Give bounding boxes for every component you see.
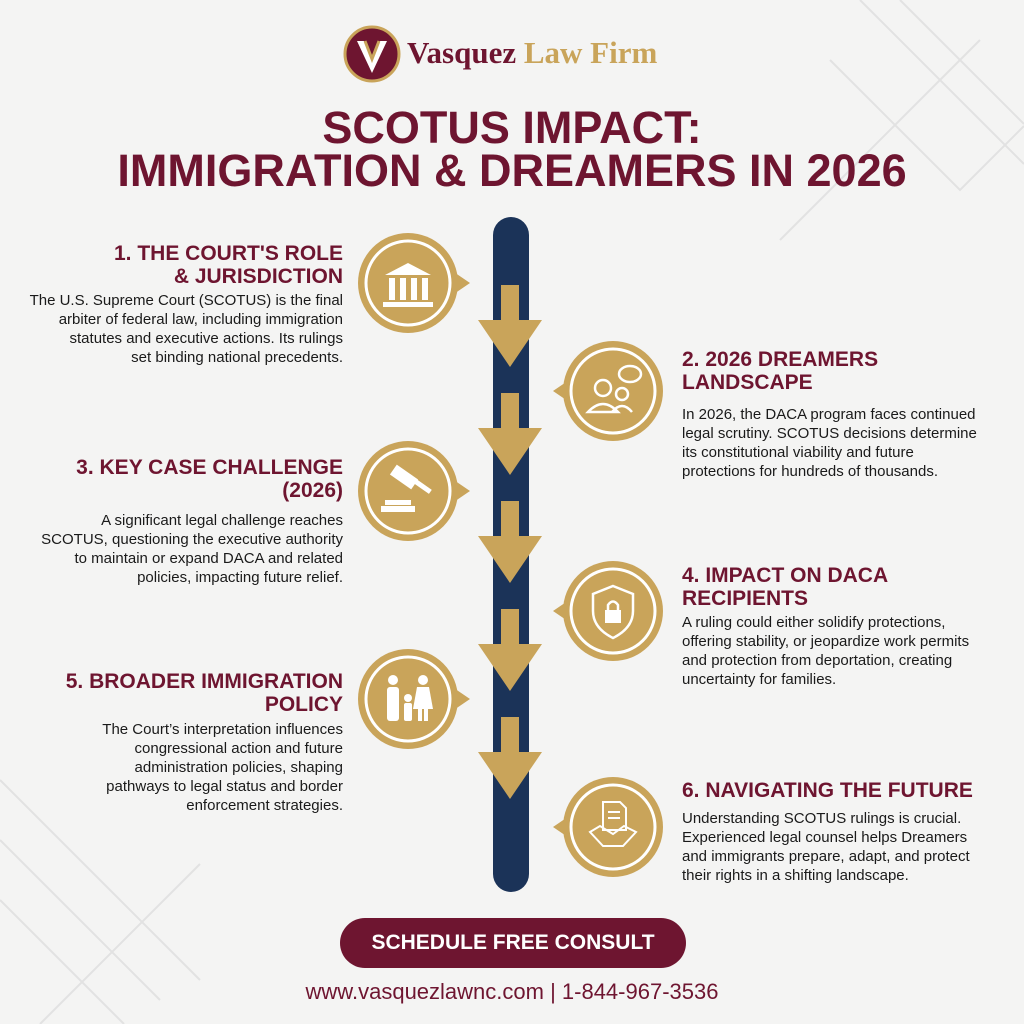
icon: courthouse — [358, 233, 470, 333]
section 6: Experienced legal counsel helps Dreamers — [682, 829, 967, 846]
section 5: administration policies, shaping — [135, 759, 343, 776]
section 5: enforcement strategies. — [186, 797, 343, 814]
section 4: 4. IMPACT ON DACA — [682, 564, 888, 587]
section 3: 3. KEY CASE CHALLENGE — [76, 456, 343, 479]
section 4: uncertainty for families. — [682, 671, 836, 688]
section 4: and protection from deportation, creating — [682, 652, 952, 669]
timeline bar with arrows — [478, 217, 542, 892]
icon: family — [358, 649, 470, 749]
section 3: to maintain or expand DACA and related — [74, 550, 343, 567]
section 6: their rights in a shifting landscape. — [682, 867, 909, 884]
section 4: offering stability, or jeopardize work permits — [682, 633, 969, 650]
icon: handshake — [553, 777, 663, 877]
section 1: set binding national precedents. — [131, 349, 343, 366]
icon: gavel — [358, 441, 470, 541]
section 1: 1. THE COURT'S ROLE — [114, 242, 343, 265]
section 3: (2026) — [282, 479, 343, 502]
section 5: The Court’s interpretation influences — [102, 721, 343, 738]
button: schedule — [340, 918, 686, 968]
section 1: arbiter of federal law, including immigration — [59, 311, 343, 328]
section 2: legal scrutiny. SCOTUS decisions determine — [682, 425, 977, 442]
section 5: pathways to legal status and border — [106, 778, 343, 795]
logo: Vasquez Law Firm — [407, 35, 657, 70]
contact line: www.vasquezlawnc.com | 1-844-967-3536 — [306, 979, 718, 1004]
section 6: Understanding SCOTUS rulings is crucial. — [682, 810, 961, 827]
title: SCOTUS IMPACT: — [322, 102, 702, 153]
section 5: congressional action and future — [135, 740, 343, 757]
section 5 — [66, 670, 343, 814]
section 2: LANDSCAPE — [682, 371, 813, 394]
section 3: SCOTUS, questioning the executive authority — [41, 531, 343, 548]
title: IMMIGRATION & DREAMERS IN 2026 — [117, 145, 907, 196]
icon: dreamers — [553, 341, 663, 441]
title — [117, 102, 907, 196]
section 4 — [682, 564, 969, 688]
section 6: and immigrants prepare, adapt, and protect — [682, 848, 970, 865]
section 1: & JURISDICTION — [174, 265, 343, 288]
section 2: protections for hundreds of thousands. — [682, 463, 938, 480]
section 6: 6. NAVIGATING THE FUTURE — [682, 779, 973, 802]
section 1: statutes and executive actions. Its rulings — [70, 330, 343, 347]
section 5: POLICY — [265, 693, 343, 716]
section 5: 5. BROADER IMMIGRATION — [66, 670, 343, 693]
section 2: 2. 2026 DREAMERS — [682, 348, 878, 371]
section 3: policies, impacting future relief. — [137, 569, 343, 586]
icon: shield — [553, 561, 663, 661]
section 1 — [30, 242, 343, 366]
logo — [344, 26, 657, 82]
section 4: RECIPIENTS — [682, 587, 808, 610]
section 6 — [682, 779, 973, 884]
button: schedule: SCHEDULE FREE CONSULT — [371, 931, 655, 954]
section 3: A significant legal challenge reaches — [101, 512, 343, 529]
section 4: A ruling could either solidify protections, — [682, 614, 945, 631]
section 2 — [682, 348, 977, 480]
section 2: its constitutional viability and future — [682, 444, 914, 461]
section 2: In 2026, the DACA program faces continued — [682, 406, 976, 423]
section 3 — [41, 456, 343, 586]
section 1: The U.S. Supreme Court (SCOTUS) is the final — [30, 292, 343, 309]
